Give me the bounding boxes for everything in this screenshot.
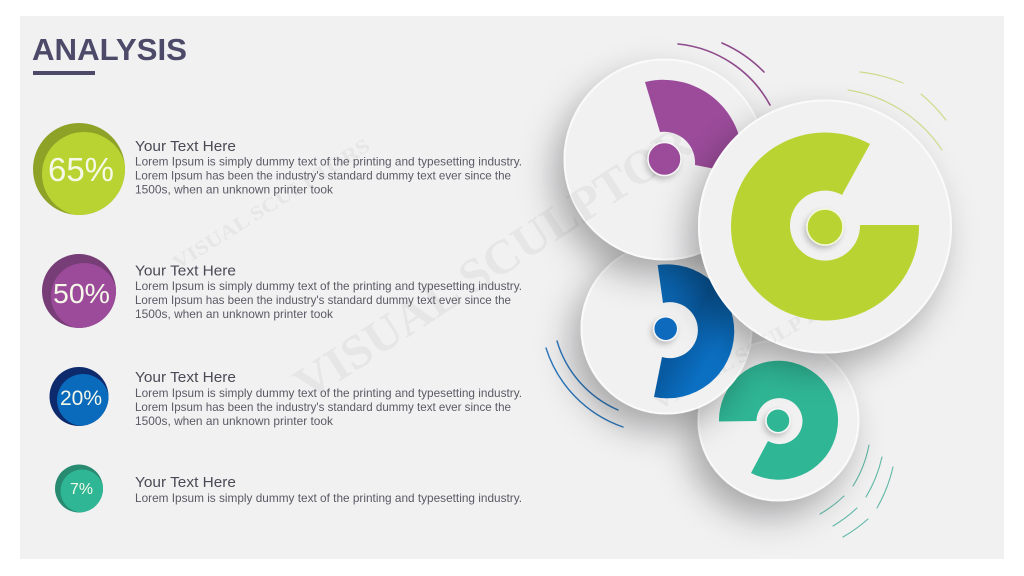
text block 2: Your Text Here bbox=[135, 264, 236, 280]
disc: blue: VISUAL SCULPTORS bbox=[652, 280, 862, 414]
badge: 65%: 65% bbox=[48, 151, 114, 188]
text block 1: Lorem Ipsum has been the industry's standard dummy text ever since the bbox=[135, 168, 511, 182]
watermark: VISUAL SCULPTORS bbox=[285, 100, 725, 411]
text block 4: Lorem Ipsum is simply dummy text of the printing and typesetting industry. bbox=[135, 491, 522, 505]
arcs: purple bbox=[678, 43, 770, 105]
badge: 7% bbox=[55, 464, 104, 512]
text block 3 bbox=[135, 370, 522, 428]
text block 3: Lorem Ipsum has been the industry's standard dummy text ever since the bbox=[135, 400, 511, 414]
text block 4 bbox=[135, 475, 522, 505]
text block 1: Lorem Ipsum is simply dummy text of the printing and typesetting industry. bbox=[135, 154, 522, 168]
arcs: teal bbox=[820, 445, 893, 537]
text block 1: Your Text Here bbox=[135, 139, 236, 155]
text block 2 bbox=[135, 264, 522, 321]
text block 2: Lorem Ipsum has been the industry's standard dummy text ever since the bbox=[135, 293, 511, 307]
text block 2: 1500s, when an unknown printer took bbox=[135, 307, 334, 321]
text block 3: 1500s, when an unknown printer took bbox=[135, 414, 334, 428]
badge: 20%: 20% bbox=[60, 387, 102, 410]
row 3: 20% bbox=[50, 367, 522, 428]
title: ANALYSIS bbox=[32, 32, 187, 67]
badge: 50%: 50% bbox=[53, 278, 110, 309]
row 2: 50% bbox=[42, 254, 522, 329]
hub: teal bbox=[766, 409, 790, 433]
disc: blue bbox=[552, 250, 759, 449]
disc: teal bbox=[698, 340, 858, 500]
arcs: blue bbox=[546, 341, 623, 427]
hub: purple bbox=[648, 142, 681, 176]
disc: purple bbox=[534, 56, 758, 296]
arcs: green bbox=[848, 72, 946, 150]
disc: purple: VISUAL SCULPTORS bbox=[285, 100, 725, 411]
text block 1: 1500s, when an unknown printer took bbox=[135, 182, 334, 196]
text block 3: Lorem Ipsum is simply dummy text of the printing and typesetting industry. bbox=[135, 386, 522, 400]
watermark: VISUAL SCULPTORS bbox=[169, 135, 374, 274]
text block 4: Your Text Here bbox=[135, 475, 236, 491]
row 1: 65% bbox=[33, 123, 522, 216]
disc: green bbox=[652, 100, 951, 414]
badge: 65% bbox=[33, 123, 126, 216]
disc: green: VISUAL SCULPTORS bbox=[652, 280, 862, 414]
text block 2: Lorem Ipsum is simply dummy text of the printing and typesetting industry. bbox=[135, 279, 522, 293]
text block 1 bbox=[135, 139, 522, 196]
hub: green bbox=[807, 209, 843, 245]
badge: 7%: 7% bbox=[70, 481, 93, 498]
badge: 50% bbox=[42, 254, 117, 329]
row 4: 7% bbox=[55, 464, 522, 512]
text block 3: Your Text Here bbox=[135, 370, 236, 386]
hub: blue bbox=[654, 317, 678, 341]
badge: 20% bbox=[50, 367, 109, 426]
